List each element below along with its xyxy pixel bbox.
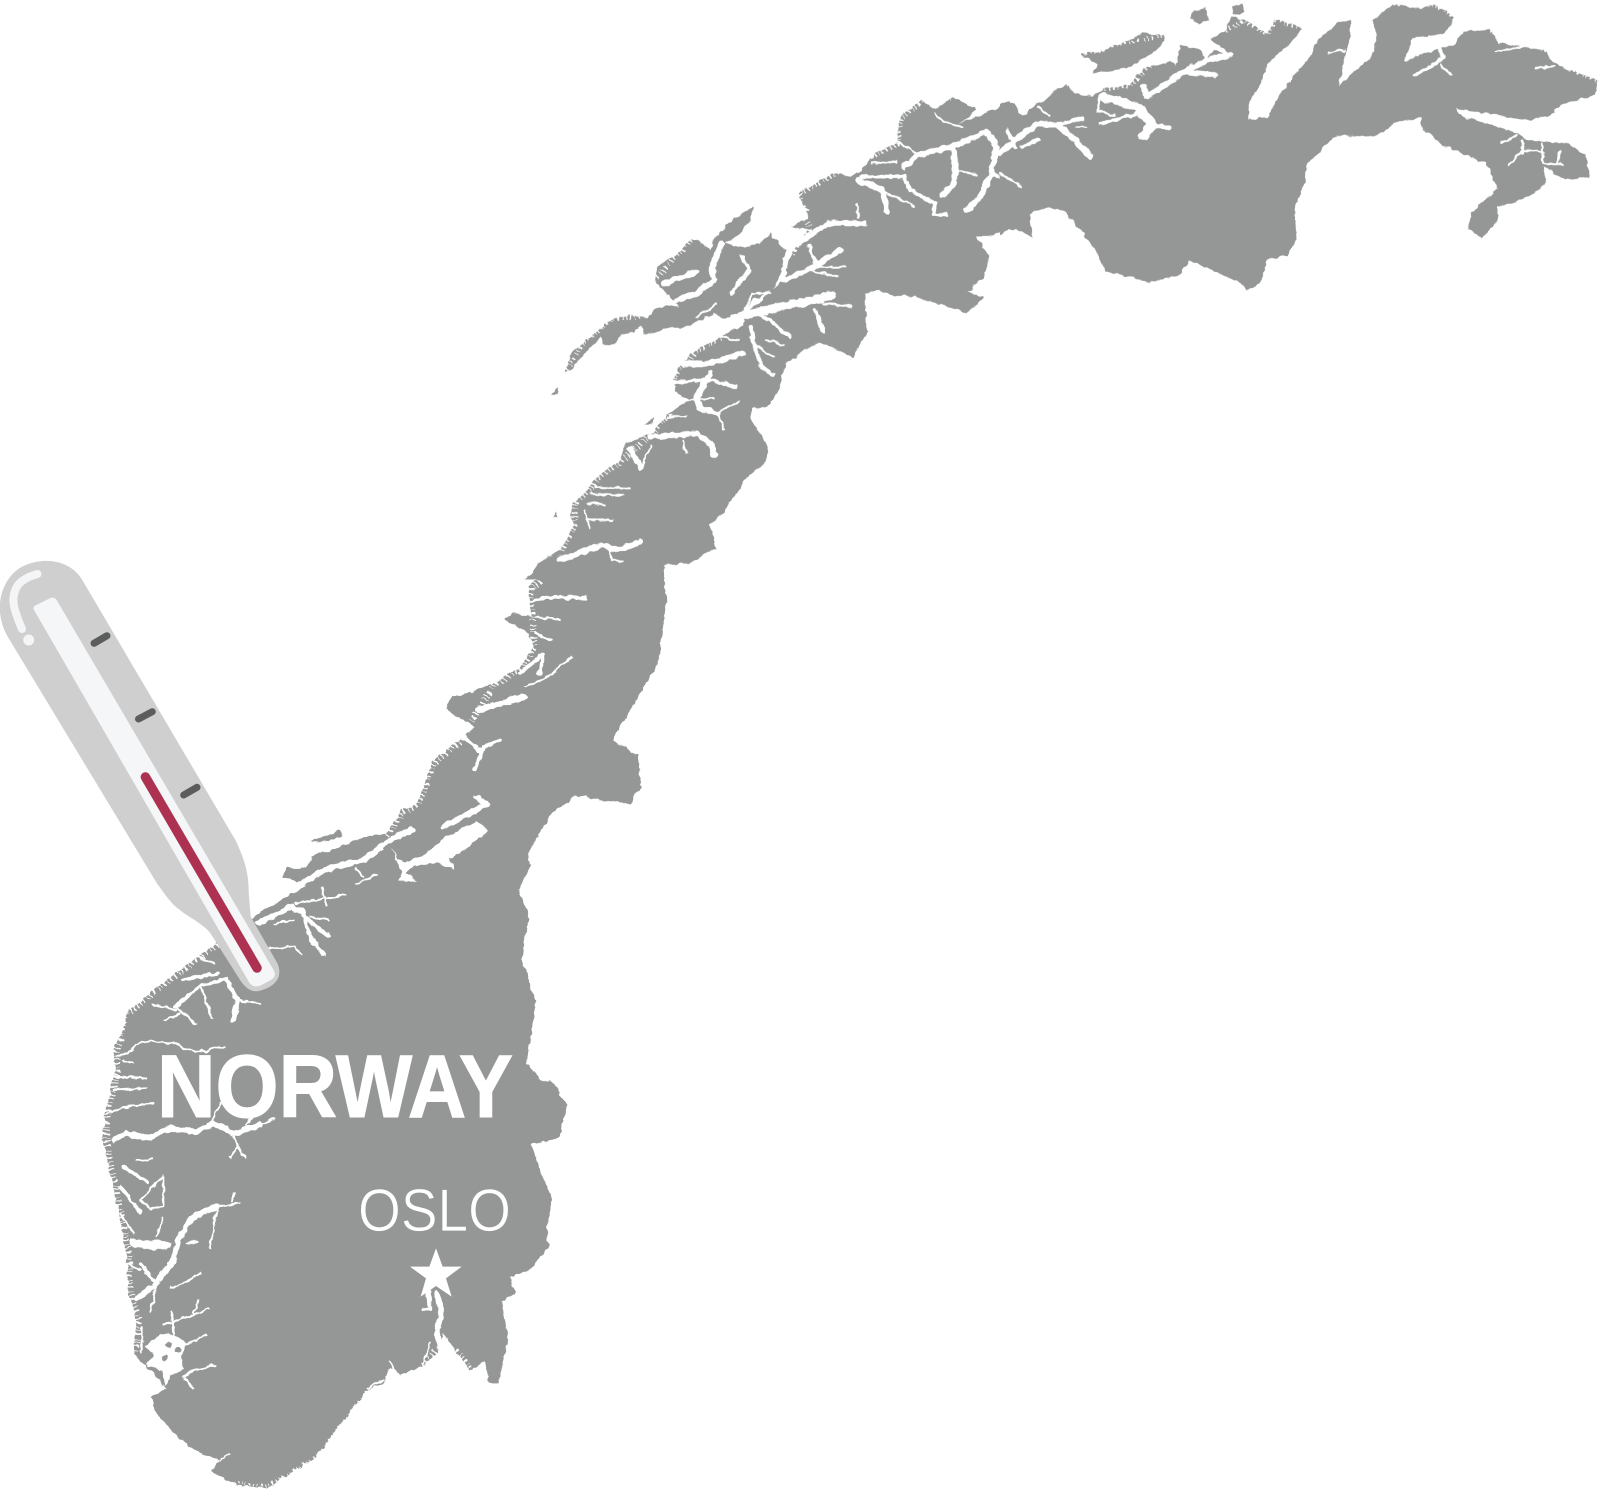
- city label: OSLO: OSLO: [358, 1177, 511, 1244]
- country label: NORWAY: NORWAY: [157, 1036, 513, 1136]
- land: Finnmark: [1000, 3, 1597, 290]
- thermometer tick marks: [94, 636, 197, 795]
- land: central Norway: [122, 540, 600, 1040]
- island: Soroya and neighbours: [1080, 33, 1166, 74]
- star: Oslo marker: [410, 1248, 462, 1297]
- land: eastern border section: [587, 541, 666, 804]
- icon: thermometer: [0, 561, 279, 991]
- thermometer body: [0, 561, 279, 991]
- land: Nordland and Troms: [525, 97, 1050, 580]
- thermometer red column: [145, 777, 257, 968]
- thermometer glass highlight: [13, 574, 37, 646]
- island chain: Lofoten and Vesteralen: [565, 207, 786, 373]
- land: southern Norway: [103, 1000, 567, 1488]
- fjord: Porsangerfjord: [1249, 40, 1318, 120]
